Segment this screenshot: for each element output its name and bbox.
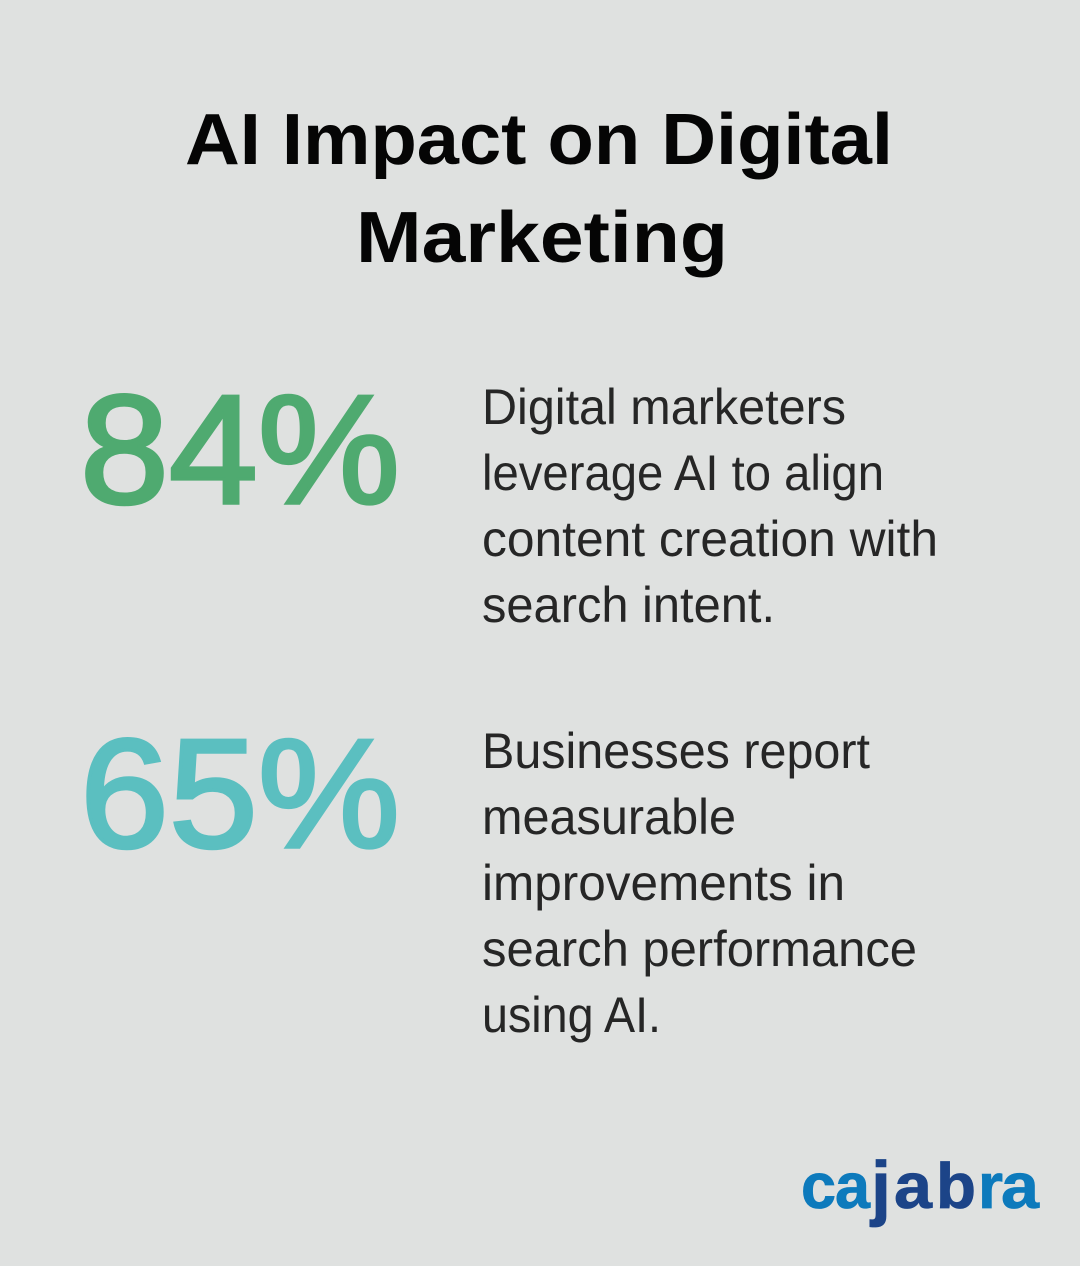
text block: 65% description: Businesses report <box>482 723 870 779</box>
stat: 84%: 84% <box>80 363 400 536</box>
text block: 65% description <box>482 723 917 1043</box>
text block: 65% description: search performance <box>482 921 917 977</box>
logo: cajabra: r <box>978 1150 1003 1222</box>
text block: 84% description: content creation with <box>482 511 938 567</box>
stat: 65%: 65% <box>80 707 400 880</box>
logo: cajabra: c <box>801 1150 836 1222</box>
title: Marketing <box>356 198 728 278</box>
text block: 65% description: using AI. <box>482 987 661 1043</box>
text block: 65% description: improvements in <box>482 855 845 911</box>
title: AI Impact on Digital <box>185 100 893 180</box>
title <box>185 100 893 278</box>
text block: 65% description: measurable <box>482 789 736 845</box>
text block: 84% description: search intent. <box>482 577 775 633</box>
logo: cajabra <box>801 1148 1039 1228</box>
logo: cajabra: a <box>894 1150 932 1222</box>
text block: 84% description: Digital marketers <box>482 379 846 435</box>
text block: 84% description: leverage AI to align <box>482 445 884 501</box>
logo: cajabra: j <box>869 1148 891 1228</box>
logo: cajabra: a <box>835 1150 870 1222</box>
text block: 84% description <box>482 379 938 633</box>
logo: cajabra: b <box>936 1150 976 1222</box>
logo: cajabra: a <box>1001 1150 1039 1222</box>
